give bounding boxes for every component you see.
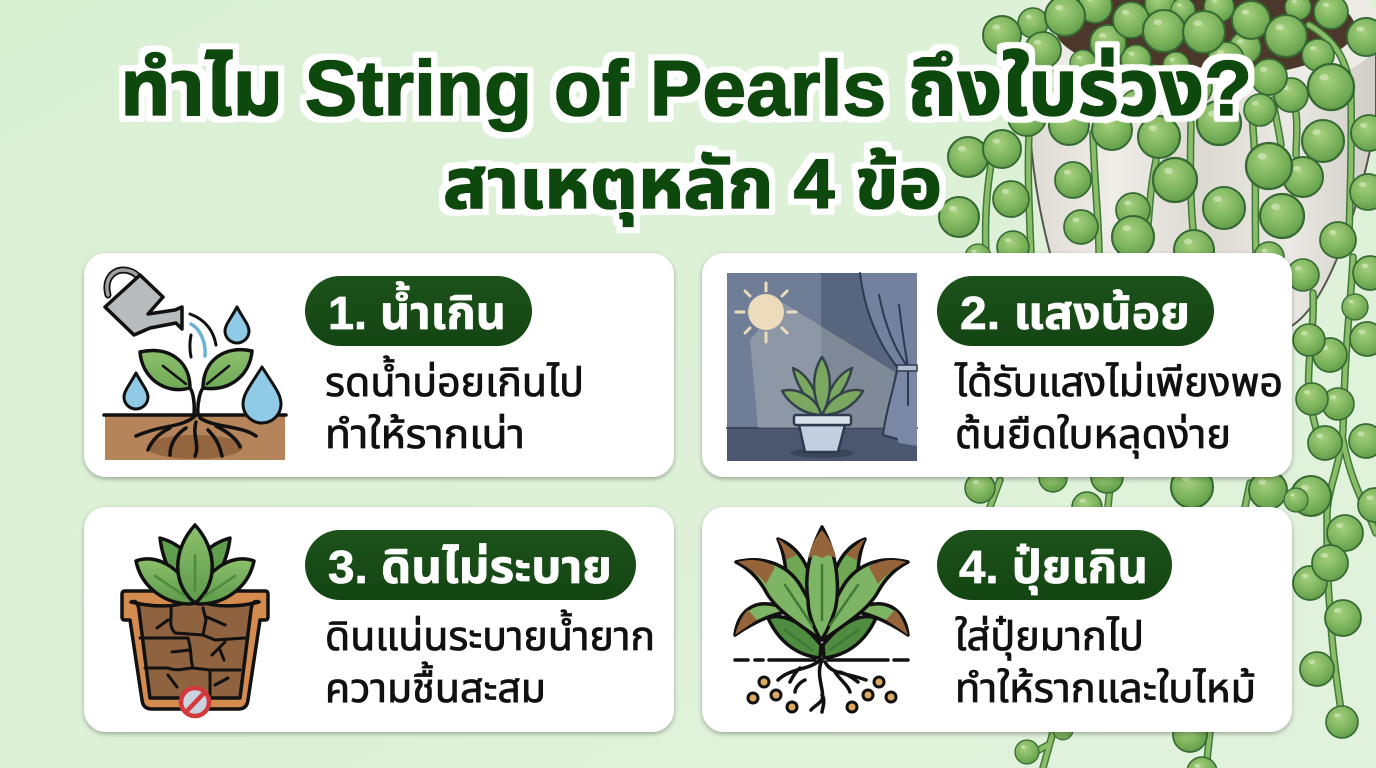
description 4 [955,615,1256,711]
badge: 3: 3. ดินไม่ระบาย [328,541,612,593]
description 3 [325,609,655,711]
description 2: ได้รับแสงไม่เพียงพอ [954,361,1283,405]
icon: watering can and seedling [104,270,286,460]
hanging pot [1027,0,1376,344]
description 3: ดินแน่นระบายน้ำยาก [325,609,655,659]
title [120,44,1252,226]
icon: dim room with plant [727,273,917,461]
badge: 2: 2. แสงน้อย [960,287,1190,339]
badge: 4 [937,530,1172,600]
description 1: ทำให้รากเน่า [325,413,525,457]
card background [84,253,674,477]
panel: 4 over-fertilizing [702,507,1292,732]
description 2 [954,361,1283,458]
pearls [939,0,1376,768]
title line 1: ทำไม String of Pearls ถึงใบร่วง? [120,44,1252,132]
badge: 4: 4. ปุ๋ยเกิน [959,541,1148,595]
panel: 1 overwatering [84,253,674,477]
card background [702,507,1292,732]
card background [702,253,1292,477]
title line 2: สาเหตุหลัก 4 ข้อ [443,145,942,226]
description 4: ทำให้รากและใบไหม้ [955,667,1256,711]
description 1: รดน้ำบ่อยเกินไป [325,355,584,405]
description 1 [325,355,584,457]
panel: 3 poor drainage [84,507,674,732]
badge: 3 [305,530,636,600]
icon: pot with compacted soil [122,525,268,716]
description 4: ใส่ปุ๋ยมากไป [955,615,1144,660]
badge: 1: 1. น้ำเกิน [328,281,506,339]
string of pearls plant [939,0,1376,768]
card background [84,507,674,732]
description 2: ต้นยืดใบหลุดง่าย [955,413,1231,458]
description 3: ความชื้นสะสม [325,661,546,711]
icon: scorched plant with fertilizer pellets [735,527,908,712]
vines [986,25,1376,768]
badge: 1 [305,276,532,346]
badge: 2 [937,276,1214,346]
panel: 2 low light [702,253,1292,477]
